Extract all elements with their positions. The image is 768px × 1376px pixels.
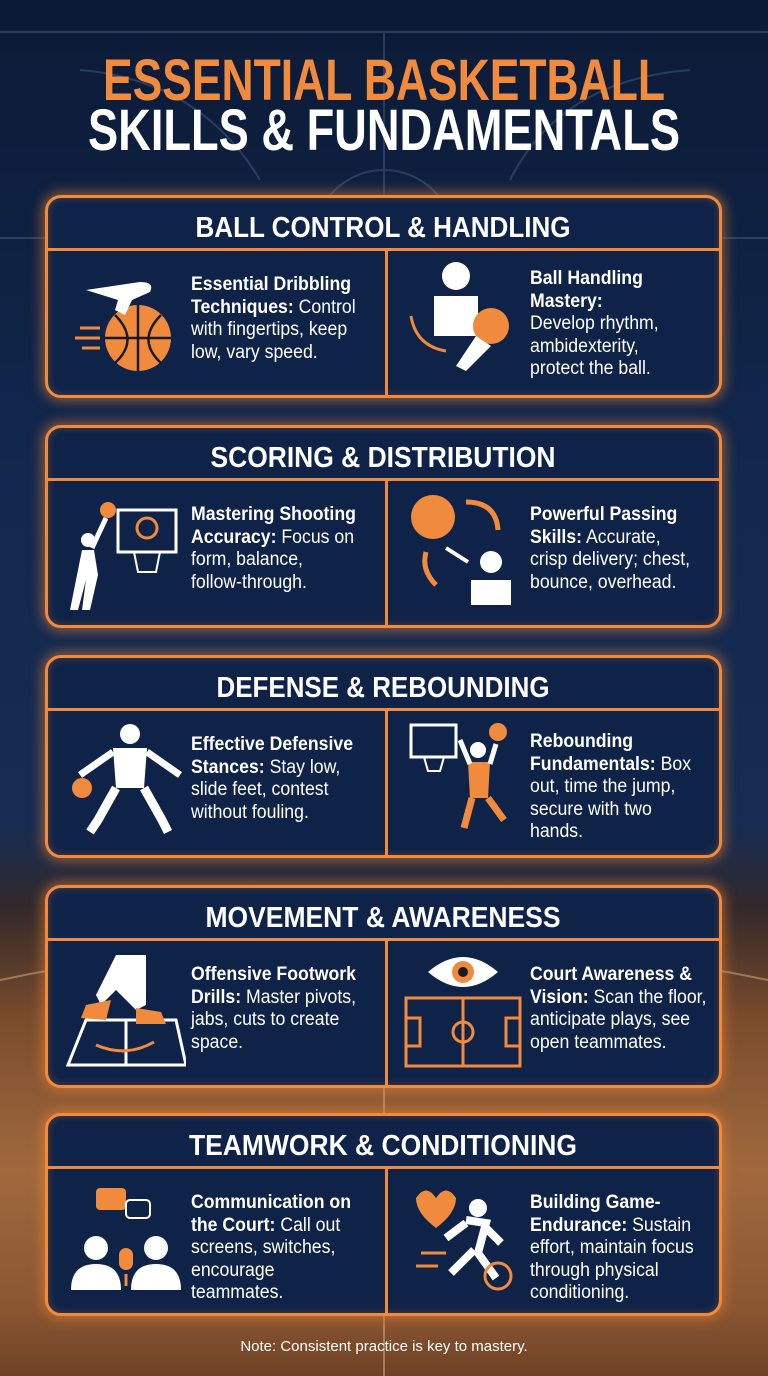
text: rebounding: out, time the jump, [530, 776, 675, 797]
text: endurance: through physical [530, 1260, 659, 1280]
text: footwork: space. [191, 1032, 243, 1052]
heading [48, 1116, 719, 1169]
text: rebounding: Fundamentals: Box [530, 754, 691, 774]
title [88, 48, 680, 160]
heading: BALL CONTROL & HANDLING [196, 212, 570, 244]
text: defense [191, 734, 353, 822]
text: passing: Skills: Accurate, [530, 526, 661, 548]
text: endurance [530, 1192, 694, 1303]
heading [48, 198, 719, 251]
icon: communication [71, 1188, 181, 1290]
text: communication [191, 1192, 351, 1303]
text: dribbling: Techniques: Control [191, 296, 356, 318]
icon: shooting [70, 502, 178, 610]
icon: footwork [66, 955, 186, 1066]
panel: teamwork [45, 1113, 722, 1316]
text: court awareness: anticipate plays, see [530, 1009, 690, 1030]
text: ball handling: Develop rhythm, [530, 313, 659, 334]
text: ball handling: ambidexterity, [530, 336, 639, 356]
text: endurance: effort, maintain focus [530, 1237, 694, 1258]
text: rebounding: secure with two [530, 798, 652, 820]
text: communication: Communication on [191, 1192, 351, 1213]
text: passing: crisp delivery; chest, [530, 549, 690, 570]
text: defense: Stances: Stay low, [191, 756, 340, 778]
heading: SCORING & DISTRIBUTION [210, 442, 556, 474]
panel: scoring [45, 425, 722, 628]
text: rebounding: hands. [530, 821, 583, 842]
heading: MOVEMENT & AWARENESS [206, 902, 560, 934]
text: rebounding [530, 731, 691, 842]
heading: TEAMWORK & CONDITIONING [189, 1130, 577, 1162]
text: passing [530, 504, 690, 592]
text: defense: slide feet, contest [191, 779, 329, 800]
panel: movement [45, 885, 722, 1088]
text: court awareness: open teammates. [530, 1032, 667, 1052]
text: shooting: follow-through. [191, 572, 307, 592]
text: footwork: Drills: Master pivots, [191, 986, 356, 1008]
icon: ball handling [410, 262, 509, 371]
text: ball handling: Ball Handling [530, 268, 643, 289]
heading: DEFENSE & REBOUNDING [216, 672, 550, 704]
icon: dribbling [75, 282, 171, 371]
text: communication: encourage [191, 1260, 275, 1280]
text: shooting: Accuracy: Focus on [191, 526, 354, 548]
heading [48, 888, 719, 941]
icon: rebounding [410, 723, 507, 829]
text: endurance: Endurance: Sustain [530, 1214, 691, 1236]
text: passing: Powerful Passing [530, 504, 677, 525]
text: defense: Effective Defensive [191, 734, 353, 755]
text: communication: the Court: Call out [191, 1214, 340, 1236]
text: communication: teammates. [191, 1282, 283, 1303]
text: shooting: Mastering Shooting [191, 504, 356, 525]
text: defense: without fouling. [191, 802, 309, 822]
panel: defense [45, 655, 722, 858]
text: footwork [190, 964, 356, 1052]
text: court awareness: Vision: Scan the floor, [530, 986, 706, 1008]
icon: court vision [404, 957, 522, 1068]
text: dribbling [191, 274, 356, 362]
panel: ball control [45, 195, 722, 398]
text: communication: screens, switches, [191, 1237, 335, 1258]
text: footwork: jabs, cuts to create [191, 1009, 339, 1030]
text: court awareness: Court Awareness & [530, 964, 692, 985]
text: dribbling: low, vary speed. [191, 342, 318, 362]
text: shooting: form, balance, [191, 549, 303, 570]
text: ball handling: Mastery: [530, 290, 603, 312]
icon: defensive stance [72, 724, 182, 834]
text: court awareness [530, 964, 706, 1052]
text: dribbling: Essential Dribbling [191, 274, 351, 295]
text: ball handling [530, 268, 659, 379]
icon: passing [411, 495, 511, 605]
text: shooting [191, 504, 356, 592]
heading [48, 428, 719, 481]
footer note: Note: Consistent practice is key to mastery. [240, 1338, 528, 1355]
text: footwork: Offensive Footwork [191, 964, 356, 985]
icon: endurance [416, 1190, 512, 1290]
text: endurance: Building Game- [530, 1192, 661, 1213]
text: passing: bounce, overhead. [530, 572, 676, 592]
text: ball handling: protect the ball. [530, 358, 651, 379]
text: endurance: conditioning. [530, 1282, 629, 1303]
text: dribbling: with fingertips, keep [191, 319, 347, 340]
heading [48, 658, 719, 711]
text: rebounding: Rebounding [530, 731, 633, 752]
